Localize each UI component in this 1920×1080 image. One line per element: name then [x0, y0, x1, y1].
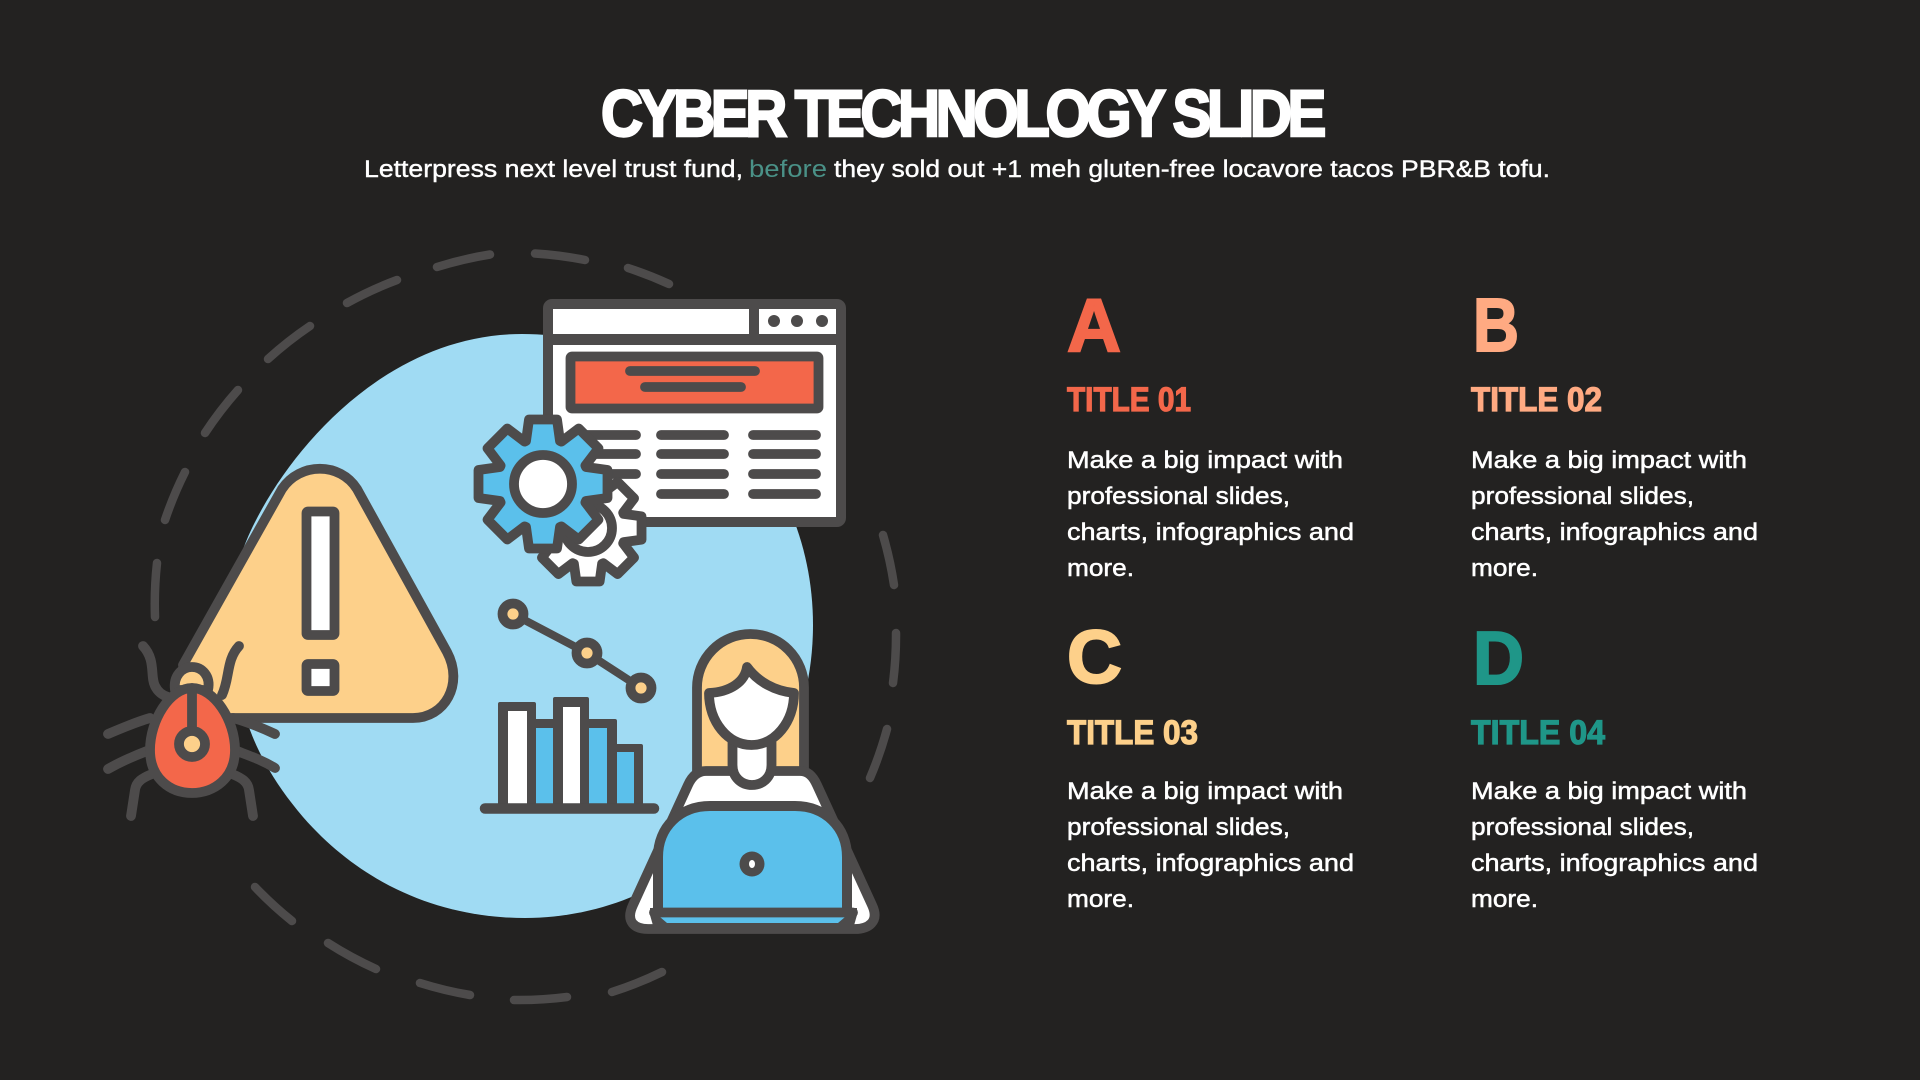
body text: Make a big impact with [1067, 447, 1343, 474]
chart: bars [485, 697, 654, 808]
letter C: C [1067, 615, 1122, 699]
panel: B [1471, 283, 1758, 582]
body text: charts, infographics and [1067, 850, 1354, 877]
panel: A [1067, 283, 1354, 582]
body text: professional slides, [1067, 814, 1290, 841]
subtitle: before [749, 156, 827, 183]
body text: more. [1067, 886, 1134, 913]
body text: professional slides, [1067, 483, 1290, 510]
icon: bug [108, 646, 275, 816]
body text: more. [1471, 555, 1538, 582]
title: CYBER TECHNOLOGY SLIDE [601, 76, 1325, 150]
body text: professional slides, [1471, 483, 1694, 510]
panel: C [1067, 615, 1354, 913]
body text: charts, infographics and [1067, 519, 1354, 546]
body text: Make a big impact with [1471, 778, 1747, 805]
letter B: B [1473, 283, 1519, 367]
body text: more. [1067, 555, 1134, 582]
body text: more. [1471, 886, 1538, 913]
dashed ring [155, 254, 896, 1000]
body text [1067, 778, 1354, 913]
subtitle [364, 156, 1550, 183]
heading: title 04: TITLE 04 [1471, 714, 1605, 752]
light blue blob [233, 334, 813, 918]
body text: Make a big impact with [1471, 447, 1747, 474]
icon: warning triangle [183, 469, 453, 718]
icon: woman with laptop [630, 634, 875, 929]
heading: title 03: TITLE 03 [1067, 714, 1198, 752]
chart: line with nodes [502, 604, 652, 698]
subtitle: they sold out +1 meh gluten-free locavore tacos PBR&B tofu. [834, 156, 1550, 183]
body text [1067, 447, 1354, 582]
body text [1471, 447, 1758, 582]
body text: professional slides, [1471, 814, 1694, 841]
icon: browser window [543, 299, 846, 527]
icon: large blue gear [478, 420, 608, 548]
heading: title 02: TITLE 02 [1471, 381, 1602, 419]
subtitle: Letterpress next level trust fund, [364, 156, 743, 183]
illustration: cyber security scene [108, 254, 896, 1000]
body text: charts, infographics and [1471, 850, 1758, 877]
body text: Make a big impact with [1067, 778, 1343, 805]
panel: D [1471, 616, 1758, 913]
icon: small white gear [534, 474, 642, 582]
heading: title 01: TITLE 01 [1067, 381, 1191, 419]
letter A: A [1067, 283, 1121, 367]
body text: charts, infographics and [1471, 519, 1758, 546]
body text [1471, 778, 1758, 913]
letter D: D [1473, 616, 1524, 700]
